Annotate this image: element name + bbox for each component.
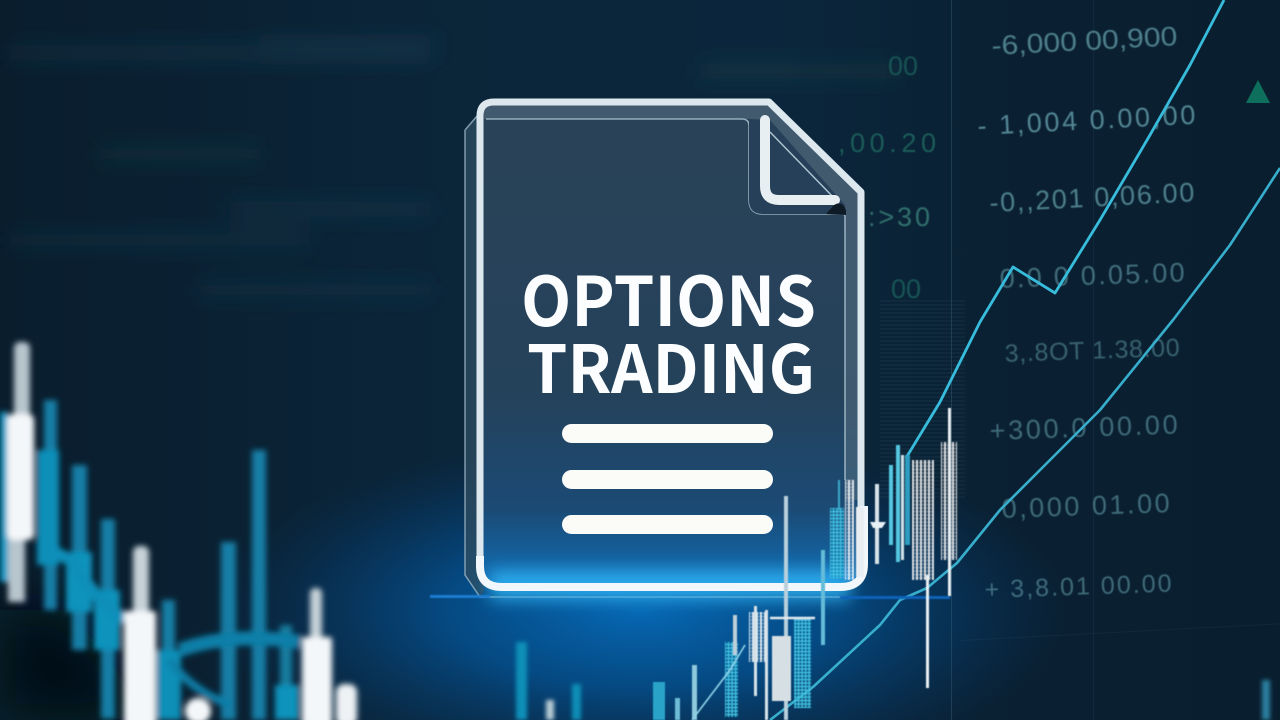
folded corner fill (749, 119, 845, 214)
blurred lower bars (516, 642, 1270, 720)
numeric price columns: + 3,8.01 00.00 (984, 569, 1172, 604)
numeric price columns: 0.0 0 0.05.00 (999, 257, 1185, 294)
folded corner bracket (765, 120, 835, 200)
numeric price columns: 0,000 01.00 (1001, 488, 1170, 524)
line chart: lower trend line (770, 168, 1280, 720)
blurred candlestick chart: left (0, 342, 357, 720)
bottom frame (480, 506, 864, 587)
wick with marker (875, 484, 879, 564)
faded green numbers: ,00.20 (838, 128, 936, 158)
numeric price columns: +300.0 00.00 (989, 409, 1178, 446)
faded green numbers: :>30 (868, 202, 930, 232)
document back outline (465, 108, 845, 597)
foreground tall wick (784, 496, 788, 720)
text line bars (562, 424, 773, 534)
icon: green up triangle (1246, 80, 1270, 103)
bottom glowing bar (490, 570, 850, 600)
numeric price columns: - 1,004 0.00,00 (977, 100, 1196, 141)
numeric price columns: -6,000 00,900 (991, 21, 1178, 61)
white candles (912, 460, 934, 580)
faded green numbers: 00 (891, 274, 921, 304)
title: trading: TRADING (527, 317, 815, 413)
line chart: upper trend line (906, 0, 1224, 458)
document body (478, 100, 864, 588)
faded green numbers (838, 51, 936, 304)
document icon (430, 100, 950, 600)
numeric price columns: -0,,201 0,06.00 (989, 177, 1195, 218)
blue streak under document (840, 596, 950, 599)
folded corner thin line (770, 132, 836, 200)
cluster over document edge (830, 508, 844, 578)
lower candles (821, 550, 825, 645)
corner shadow notch (826, 203, 846, 215)
upper bevel band (484, 105, 858, 500)
title: options: OPTIONS (521, 247, 816, 346)
numeric price columns (977, 21, 1196, 604)
numeric price columns: 3,.8OT 1.38.00 (1004, 334, 1180, 368)
document back band (465, 106, 484, 597)
blurred data rows: top left (10, 38, 900, 298)
faded green numbers: 00 (888, 51, 918, 81)
cyan candles (889, 465, 893, 545)
left glow streak (430, 595, 490, 598)
inner sheet line (486, 119, 845, 480)
outer bright frame (480, 102, 861, 560)
candlestick chart: right (653, 408, 957, 720)
